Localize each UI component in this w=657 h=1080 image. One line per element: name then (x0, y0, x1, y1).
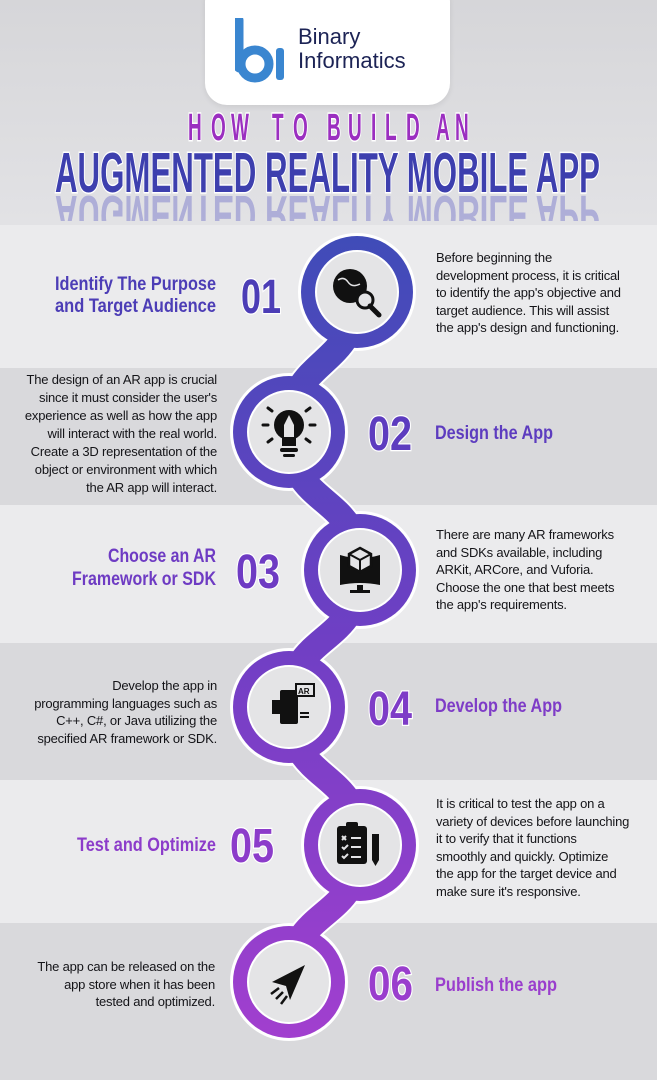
step numbers: 03 (236, 546, 280, 599)
logo text (298, 24, 406, 73)
step titles: Publish the app (435, 975, 557, 996)
step titles: Choose an AR (108, 546, 216, 567)
desc 2: object or environment with which (35, 462, 217, 477)
desc 3 (436, 527, 614, 612)
desc 1: target audience. This will assist (436, 302, 609, 318)
desc 3: the app's requirements. (436, 597, 567, 612)
desc 1: the app's design and functioning. (436, 320, 619, 335)
icon: clipboard checklist (337, 822, 379, 866)
step numbers: 04 (368, 683, 412, 736)
step titles (55, 274, 562, 996)
logo text: Informatics (298, 48, 406, 73)
step titles: and Target Audience (55, 296, 216, 317)
desc 3: ARKit, ARCore, and Vuforia. (436, 562, 593, 577)
desc 1: to identify the app's objective and (436, 285, 621, 300)
icon: light bulb (263, 408, 315, 457)
desc 4 (34, 678, 217, 746)
icon: globe search (333, 269, 379, 315)
step numbers (230, 271, 413, 1011)
timeline path (232, 235, 417, 1039)
step titles: Test and Optimize (77, 835, 216, 856)
desc 2: since it must consider the user's (39, 390, 217, 405)
desc 5: It is critical to test the app on a (436, 796, 605, 811)
desc 4: programming languages such as (34, 696, 217, 710)
icon: bi logo (235, 18, 284, 82)
step titles: Identify The Purpose (55, 274, 216, 295)
desc 4: C++, C#, or Java utilizing the (56, 713, 217, 728)
step titles: Design the App (435, 423, 553, 444)
desc 1 (436, 250, 621, 335)
step titles: Develop the App (435, 696, 562, 717)
subtitle: HOWTOBUILDAN (188, 107, 469, 149)
desc 2: Create a 3D representation of the (31, 444, 217, 459)
step numbers: 06 (368, 958, 413, 1011)
step titles: Framework or SDK (72, 569, 216, 590)
desc 5: make sure it's responsive. (436, 884, 581, 898)
desc 2: experience as well as how the app (25, 408, 217, 423)
desc 2: the AR app will interact. (86, 480, 217, 495)
icon: AR phone: AR (298, 687, 310, 696)
desc 5: it to verify that it functions (436, 831, 577, 846)
desc 5: variety of devices before launching (436, 814, 629, 828)
desc 1: Before beginning the (436, 250, 552, 265)
step numbers: 05 (230, 820, 274, 873)
desc 6 (37, 959, 215, 1009)
desc 3: There are many AR frameworks (436, 527, 614, 542)
logo card (205, 0, 450, 105)
desc 1: development process, it is critical (436, 268, 620, 282)
logo text: Binary (298, 24, 360, 49)
step numbers: 01 (241, 271, 281, 324)
background bands (0, 0, 657, 225)
desc 2 (25, 372, 217, 495)
desc 4: Develop the app in (112, 678, 217, 693)
desc 3: and SDKs available, including (436, 544, 602, 560)
desc 2: The design of an AR app is crucial (27, 372, 217, 387)
desc 6: The app can be released on the (37, 959, 215, 974)
icon: paper plane (271, 965, 305, 1004)
desc 2: will interact with the real world. (48, 426, 217, 441)
step numbers: 02 (368, 408, 412, 461)
icon: monitor with 3D cube (340, 548, 380, 593)
desc 4: specified AR framework or SDK. (37, 730, 217, 746)
icon: AR phone (272, 684, 314, 724)
desc 6: tested and optimized. (96, 994, 215, 1009)
desc 5: the app for the target device and (436, 866, 617, 881)
desc 3: Choose the one that best meets (436, 580, 614, 594)
desc 5: smoothly and quickly. Optimize (436, 848, 608, 864)
desc 6: app store when it has been (64, 976, 215, 992)
desc 5 (436, 796, 629, 898)
